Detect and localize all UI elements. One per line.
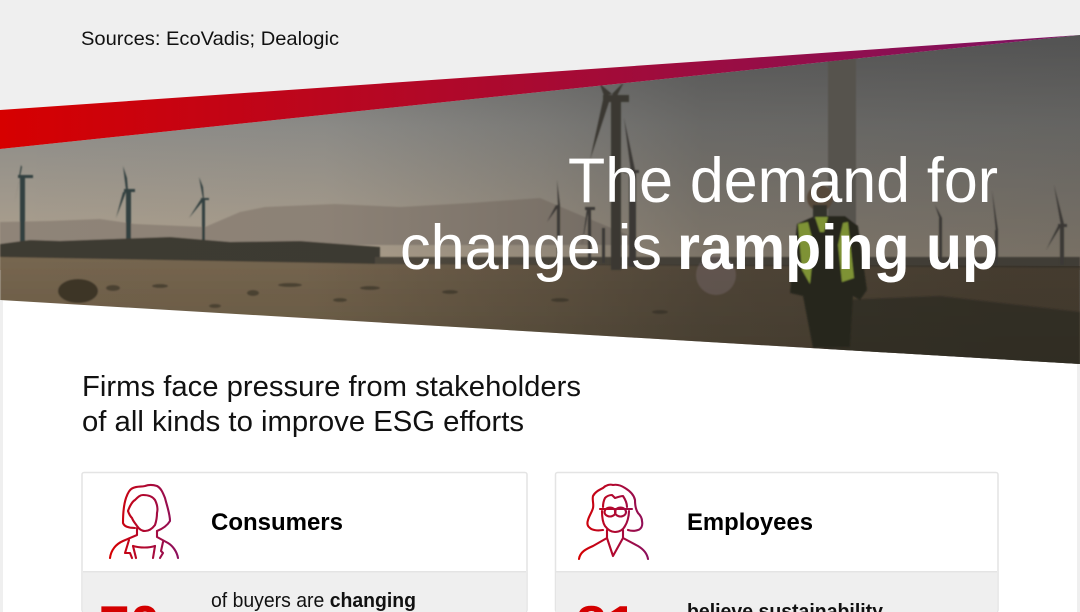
treeline bbox=[0, 237, 380, 265]
right distant turbines bbox=[547, 118, 1067, 267]
ground darkening bbox=[527, 265, 1080, 364]
heading: consumers: Consumers bbox=[211, 509, 343, 536]
mountains bbox=[0, 198, 640, 245]
white content panel bbox=[3, 290, 1077, 612]
ground bbox=[0, 257, 1080, 370]
source line: Sources: EcoVadis; Dealogic bbox=[81, 28, 339, 50]
subheading bbox=[82, 371, 581, 438]
subheading: of all kinds to improve ESG efforts bbox=[82, 406, 524, 438]
left turbines bbox=[14, 165, 209, 244]
title: change is bbox=[400, 213, 662, 283]
stat text: consumers: of buyers are changing bbox=[211, 590, 416, 612]
icon: consumer woman bbox=[110, 485, 178, 558]
scrub bush bbox=[58, 279, 98, 303]
red gradient band bbox=[0, 35, 1080, 149]
large turbine bbox=[590, 82, 629, 270]
heading: employees: Employees bbox=[687, 509, 813, 536]
panel: consumers bbox=[82, 472, 527, 612]
icon: employee woman with glasses bbox=[579, 485, 648, 559]
sky bbox=[0, 30, 1080, 270]
darkening toward right bbox=[374, 35, 1080, 364]
panel: employees bbox=[556, 472, 998, 612]
title bbox=[400, 146, 998, 283]
tower close-up bbox=[828, 50, 856, 240]
title: ramping up bbox=[677, 213, 998, 283]
lens flare bbox=[696, 255, 736, 295]
ground shadow bbox=[820, 296, 1080, 370]
hero photo: wind farm with worker bbox=[0, 30, 1080, 370]
worker bbox=[790, 185, 867, 348]
title: The demand for bbox=[568, 146, 998, 216]
subheading: Firms face pressure from stakeholders bbox=[82, 371, 581, 403]
